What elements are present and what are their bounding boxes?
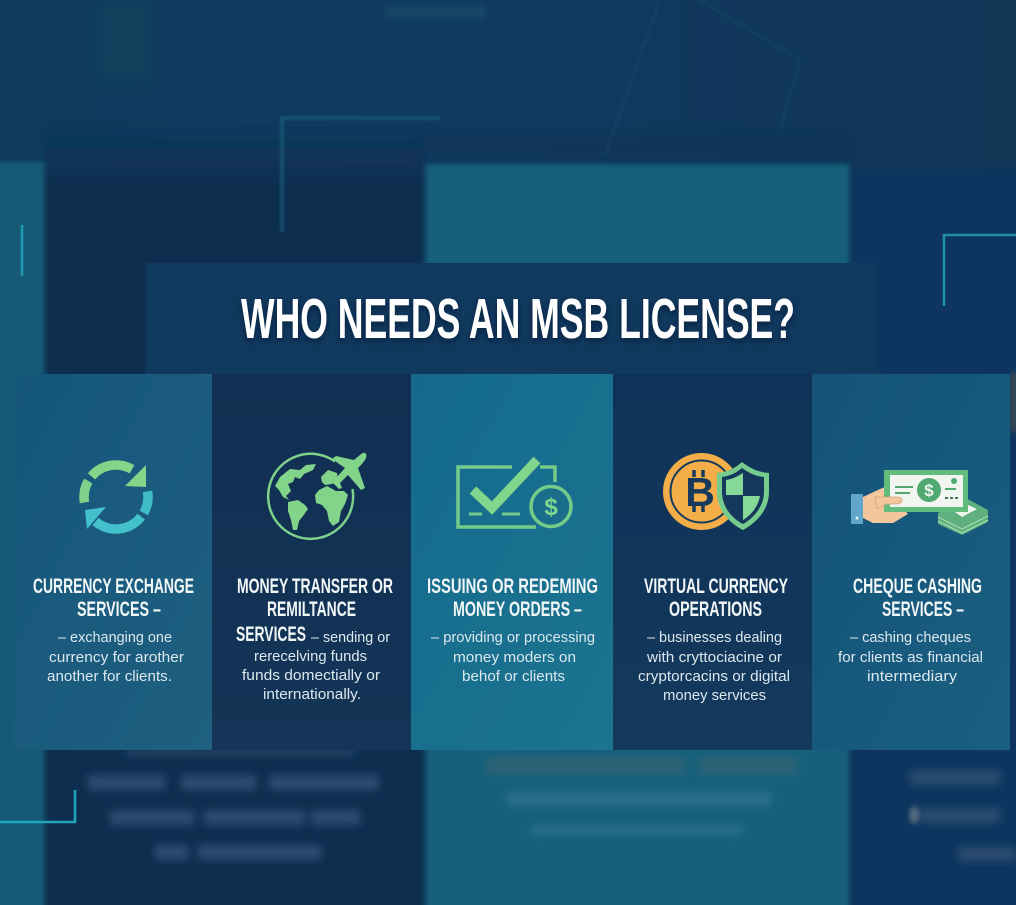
heading: MONEY ORDERS – — [453, 598, 582, 621]
description: currency for arother — [49, 649, 184, 666]
panel: money orders — [411, 374, 613, 750]
description: money moders on — [453, 649, 576, 666]
description — [242, 629, 390, 703]
heading: SERVICES – — [77, 598, 161, 621]
description: cryptorcacins or digital — [638, 668, 790, 685]
icon: hand with cheque and cash — [851, 470, 988, 535]
description: funds domectially or — [242, 667, 380, 684]
description: with cryttociacine or — [646, 649, 782, 666]
panel: money transfer — [212, 374, 411, 750]
description — [47, 629, 184, 685]
heading — [236, 575, 393, 646]
description — [431, 629, 595, 685]
heading: VIRTUAL CURRENCY — [644, 575, 788, 598]
heading: ISSUING OR REDEMING — [427, 575, 598, 598]
description — [638, 629, 790, 704]
heading: SERVICES — [236, 623, 306, 646]
description: – sending or — [311, 629, 390, 646]
heading: CURRENCY EXCHANGE — [33, 575, 194, 598]
description: intermediary — [867, 668, 958, 685]
panel: virtual currency — [613, 374, 812, 750]
icon: check and dollar coin: $ — [544, 494, 558, 521]
heading — [427, 575, 598, 621]
icon: globe and plane — [268, 453, 366, 539]
heading: SERVICES – — [882, 598, 964, 621]
icon: bitcoin and shield — [663, 453, 769, 530]
heading — [33, 575, 194, 621]
heading — [644, 575, 788, 621]
icon: bitcoin and shield: B — [685, 469, 715, 515]
description: – exchanging one — [58, 629, 172, 646]
description: – cashing cheques — [850, 629, 971, 646]
panel: cheque cashing — [812, 374, 1010, 750]
title banner — [146, 263, 878, 374]
heading: OPERATIONS — [669, 598, 762, 621]
panel: currency exchange — [14, 374, 212, 750]
icon: hand with cheque and cash: $ — [924, 481, 934, 500]
description: internationally. — [263, 686, 361, 703]
description: money services — [663, 687, 766, 704]
description — [838, 629, 983, 685]
heading: REMILTANCE — [267, 598, 356, 621]
heading — [853, 575, 982, 621]
description: for clients as financial — [838, 649, 983, 666]
description: another for clients. — [47, 668, 172, 685]
icon: exchange arrows — [84, 465, 148, 529]
description: rerecelving funds — [254, 648, 367, 665]
description: – providing or processing — [431, 629, 595, 646]
description: behof or clients — [462, 668, 565, 685]
description: – businesses dealing — [647, 629, 782, 646]
icon: check and dollar coin — [458, 460, 571, 527]
heading: MONEY TRANSFER OR — [237, 575, 393, 598]
